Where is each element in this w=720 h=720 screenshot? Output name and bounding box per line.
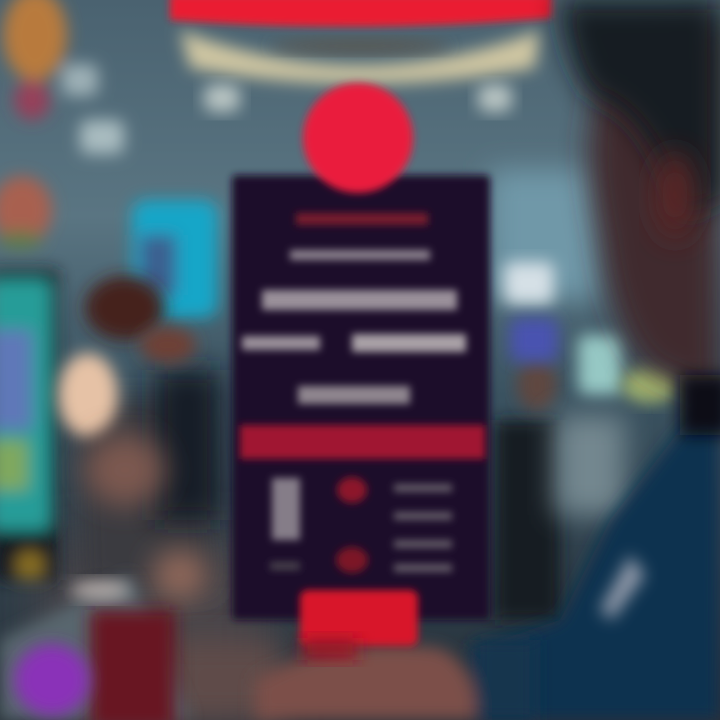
- hand holding poster: [255, 640, 535, 720]
- left background person: [58, 276, 220, 601]
- left game screen: [0, 270, 58, 580]
- red divider bar: [240, 425, 485, 459]
- foreground man on the right: [470, 0, 720, 720]
- red circle badge: [303, 83, 413, 193]
- cyan glowing shape: [132, 200, 218, 318]
- top-left decoration: [0, 0, 124, 249]
- red button: [300, 590, 418, 660]
- table columns: [270, 477, 452, 573]
- dark poster panel: [232, 175, 490, 620]
- bottom-left console and lights: [0, 575, 190, 720]
- headline glow bars: [242, 213, 466, 404]
- right background figure and lights: [495, 262, 678, 620]
- top red banner and cream ring: [170, 0, 552, 112]
